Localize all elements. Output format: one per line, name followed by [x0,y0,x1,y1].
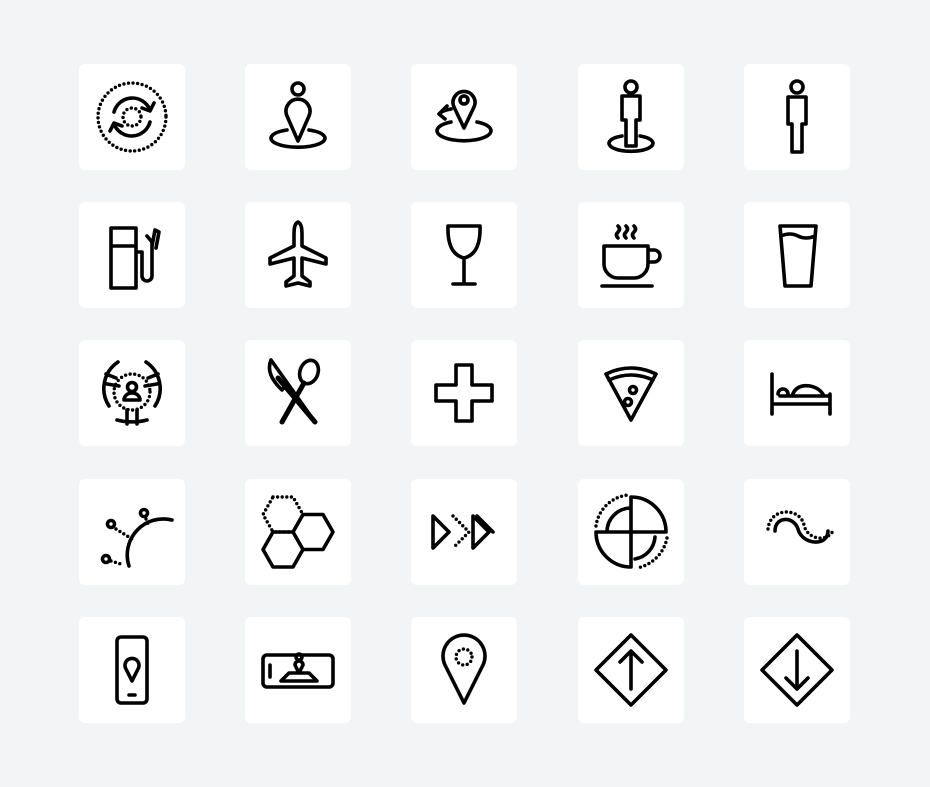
icon tile: arc with dots [79,479,185,585]
icon tile: coffee cup [578,202,684,308]
icon tile: diamond up [578,617,684,723]
icon tile: person on base [578,64,684,170]
icon tile: phone with pin [79,617,185,723]
icon tile: water glass [744,202,850,308]
icon tile: sync [79,64,185,170]
icon tile: gas station [79,202,185,308]
icon tile: arrows [411,479,517,585]
icon tile: landscape phone [245,617,351,723]
icon tile: steering wheel [79,340,185,446]
icon tile: knife and spoon [245,340,351,446]
icon tile: pin rotate [411,64,517,170]
icon tile: person pin [245,64,351,170]
icon tile: pizza [578,340,684,446]
icon tile: location pin [411,617,517,723]
icon tile: bed [744,340,850,446]
icon tile: wine glass [411,202,517,308]
icon tile: plane [245,202,351,308]
icon tile: person [744,64,850,170]
icon tile: hexagons [245,479,351,585]
icon tile: cross [411,340,517,446]
icon tile: wave [744,479,850,585]
icon tile: quartered circle [578,479,684,585]
icon tile: diamond down [744,617,850,723]
